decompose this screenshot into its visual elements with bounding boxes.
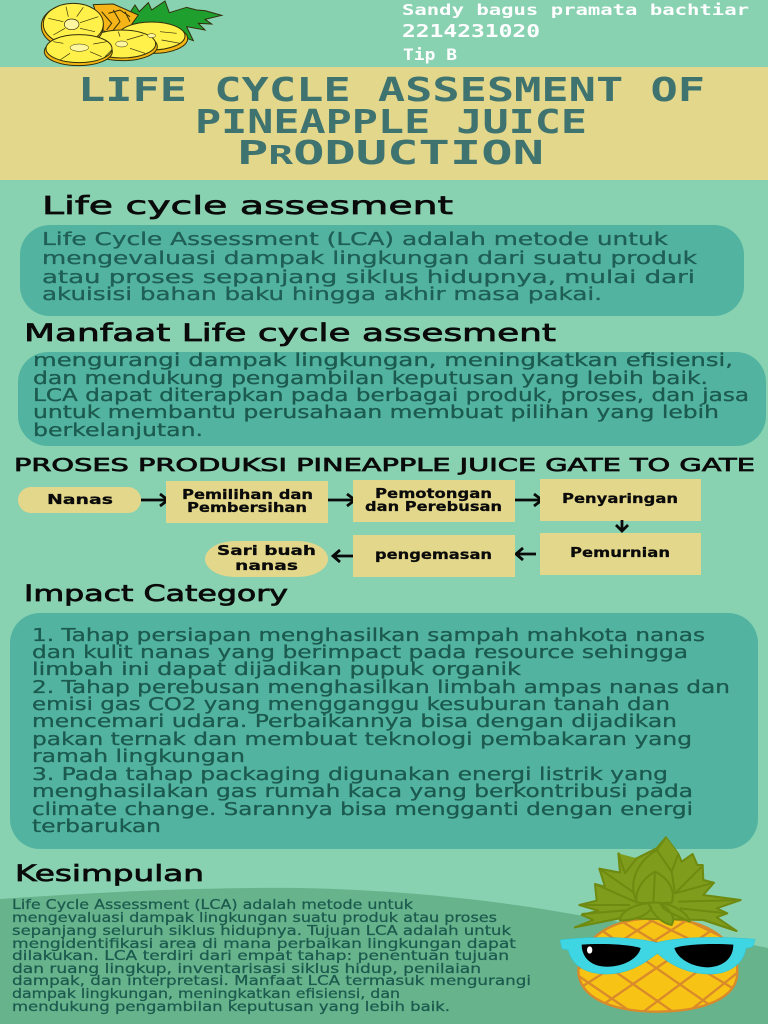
node: nanas: Nanas xyxy=(47,493,113,508)
heading: proses produksi: PROSES PRODUKSI PINEAPPLE JUICE GATE TO GATE xyxy=(14,455,755,476)
impact text: dan kulit nanas yang berimpact pada resource sehingga xyxy=(32,643,688,663)
conclusion text: dampak, dan interpretasi. Manfaat LCA termasuk mengurangi xyxy=(12,973,531,989)
impact text: terbarukan xyxy=(32,817,161,837)
icon: pineapple with sunglasses xyxy=(560,837,757,1017)
impact text: 2. Tahap perebusan menghasilkan limbah ampas nanas dan xyxy=(32,678,730,698)
impact text: climate change. Sarannya bisa mengganti dengan energi xyxy=(32,800,693,820)
node: pemilihan: Pemilihan dan xyxy=(182,488,313,503)
impact text: limbah ini dapat dijadikan pupuk organik xyxy=(32,660,522,680)
node: pengemasan: pengemasan xyxy=(375,548,492,563)
definition text: akuisisi bahan baku hingga akhir masa pakai. xyxy=(42,284,602,305)
node: pemotongan: Pemotongan xyxy=(375,487,492,502)
impact text: pakan ternak dan membuat teknologi pembakaran yang xyxy=(32,730,692,750)
node: pengemasan xyxy=(353,535,515,577)
arrow xyxy=(333,550,353,562)
node: pemurnian: Pemurnian xyxy=(570,546,670,561)
impact text xyxy=(32,626,730,837)
conclusion text: sepanjang seluruh siklus hidupnya. Tujuan LCA adalah untuk xyxy=(12,923,511,939)
impact text: menghasilakan gas rumah kaca yang berkontribusi pada xyxy=(32,782,693,802)
flow chart xyxy=(18,479,701,577)
arrow xyxy=(516,548,536,560)
header: author details xyxy=(402,1,749,64)
arrow xyxy=(515,494,542,506)
heading: kesimpulan: Kesimpulan xyxy=(15,862,204,887)
title banner xyxy=(0,67,768,180)
node: pemilihan xyxy=(166,481,328,523)
manfaat text: LCA dapat diterapkan pada berbagai produk, proses, dan jasa xyxy=(33,386,749,406)
student number: 2214231020 xyxy=(402,21,540,42)
conclusion text: dampak lingkungan, meningkatkan efisiensi, dan xyxy=(12,986,400,1002)
conclusion text: dilakukan. LCA terdiri dari empat tahap: penentuan tujuan xyxy=(12,948,509,964)
sunglasses xyxy=(560,937,755,974)
definition text: Life Cycle Assessment (LCA) adalah metode untuk xyxy=(42,229,669,250)
impact text: emisi gas CO2 yang mengganggu kesuburan tanah dan xyxy=(32,695,670,715)
node: sari buah nanas: nanas xyxy=(235,559,298,574)
panel: impact category xyxy=(10,613,758,849)
conclusion text xyxy=(12,897,531,1015)
icon: pineapple slices xyxy=(41,1,222,66)
title: P R ODUCTION xyxy=(237,133,544,172)
heading: manfaat: Manfaat Life cycle assesment xyxy=(24,319,556,347)
manfaat text: dan mendukung pengambilan keputusan yang lebih baik. xyxy=(33,369,708,389)
impact text: 3. Pada tahap packaging digunakan energi listrik yang xyxy=(32,765,668,785)
definition text: mengevaluasi dampak lingkungan dari suatu produk xyxy=(42,248,698,269)
arrow xyxy=(328,494,355,506)
heading: life cycle assesment: Life cycle assesment xyxy=(42,191,453,220)
impact text: ramah lingkungan xyxy=(32,747,245,767)
node: nanas xyxy=(18,487,141,513)
arrow xyxy=(616,520,628,531)
manfaat text xyxy=(33,351,749,441)
conclusion text: mendukung pengambilan keputusan yang lebih baik. xyxy=(12,999,450,1015)
pineapple body xyxy=(577,920,738,1013)
pineapple crown xyxy=(575,837,741,931)
author name: Sandy bagus pramata bachtiar xyxy=(402,1,749,19)
conclusion text: dan ruang lingkup, inventarisasi siklus hidup, penilaian xyxy=(12,961,481,977)
node: penyaringan: Penyaringan xyxy=(562,492,678,507)
node: sari buah nanas: Sari buah xyxy=(217,544,316,559)
panel: conclusion background xyxy=(0,888,768,1024)
node: pemurnian xyxy=(540,533,701,575)
title: LIFE CYCLE ASSESMENT OF xyxy=(78,70,705,109)
arrow xyxy=(141,494,168,506)
conclusion text: mengevaluasi dampak lingkungan suatu produk atau proses xyxy=(12,910,497,926)
impact text: mencemari udara. Perbaikannya bisa dengan dijadikan xyxy=(32,712,677,732)
panel: manfaat xyxy=(18,351,766,446)
title xyxy=(78,70,705,172)
definition text xyxy=(42,229,698,305)
node: penyaringan xyxy=(540,479,701,521)
manfaat text: mengurangi dampak lingkungan, meningkatkan efisiensi, xyxy=(33,351,733,371)
heading: impact category: Impact Category xyxy=(24,582,288,607)
node: pemotongan xyxy=(353,480,515,522)
title: PINEAPPLE JUICE xyxy=(195,102,587,141)
manfaat text: untuk membantu perusahaan membuat pilihan yang lebih xyxy=(33,403,719,423)
node: sari buah nanas xyxy=(205,541,328,577)
node: pemotongan: dan Perebusan xyxy=(365,500,502,515)
class: Tip B xyxy=(403,45,457,64)
conclusion text: Life Cycle Assessment (LCA) adalah metode untuk xyxy=(12,897,413,913)
manfaat text: berkelanjutan. xyxy=(33,421,203,441)
conclusion text: mengidentifikasi area di mana perbaikan lingkungan dapat xyxy=(12,936,516,952)
panel: definition xyxy=(20,225,744,316)
definition text: atau proses sepanjang siklus hidupnya, mulai dari xyxy=(42,267,695,288)
node: pemilihan: Pembersihan xyxy=(187,501,307,516)
impact text: 1. Tahap persiapan menghasilkan sampah mahkota nanas xyxy=(32,626,705,646)
